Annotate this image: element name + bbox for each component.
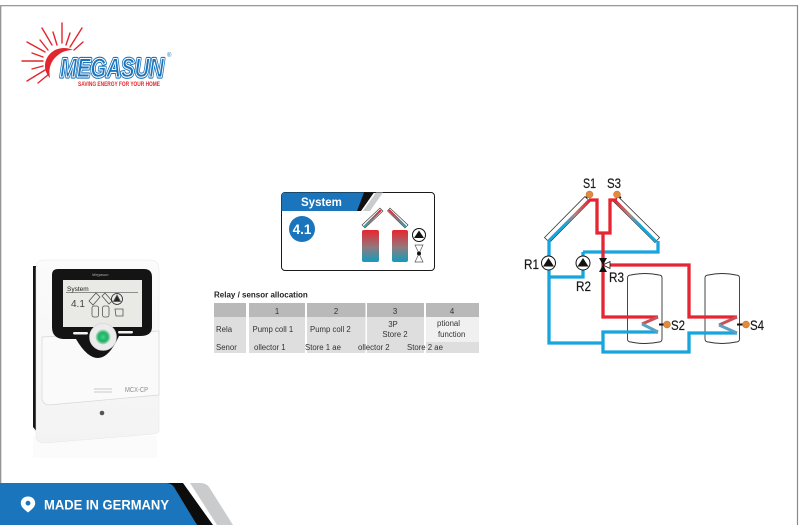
sensor cells: Store 1 ae: [305, 343, 341, 352]
sensor cells: ollector 2: [358, 343, 390, 352]
device LED: [96, 330, 110, 344]
mini collector right: [388, 208, 408, 228]
sensor cells: ollector 1: [254, 343, 286, 352]
header stripe black: [357, 192, 374, 211]
schematic labels: S3: [607, 175, 621, 191]
screen icons: [89, 293, 123, 317]
sensor S2: [659, 321, 670, 328]
device screen: [63, 280, 142, 327]
relay cells: Pump coll 2: [310, 325, 351, 334]
wordmark outline: MEGASUN: [60, 53, 164, 83]
icon: sun rays: [22, 23, 83, 83]
footer gray stripe: [190, 483, 233, 525]
tagline: SAVING ENERGY FOR YOUR HOME: [78, 82, 160, 88]
blue return pipes: [549, 241, 737, 352]
relay cells: Store 2: [382, 330, 408, 339]
header stripe gray: [363, 192, 383, 211]
heating coils: [642, 317, 737, 333]
sensor S4: [737, 321, 750, 328]
table: relay/sensor allocation: [214, 290, 479, 353]
panel header: [282, 192, 371, 211]
registered mark: ®: [167, 52, 172, 59]
device lower cover: [42, 331, 159, 405]
relay cells: [252, 319, 465, 339]
table column numbers: 1: [275, 307, 279, 316]
icon: location pin: [21, 496, 35, 512]
table highlighted cell: [426, 317, 479, 342]
schematic labels: R3: [609, 269, 624, 285]
relay cells: 3P: [388, 320, 398, 329]
row label relay: Rela: [216, 325, 233, 334]
footer black stripe: [166, 483, 213, 525]
table body rows: [214, 317, 479, 353]
pump R2: [576, 256, 590, 270]
device button right: [118, 331, 133, 334]
device body: [36, 260, 159, 443]
schematic labels: R1: [524, 256, 539, 272]
mini collector left: [362, 208, 383, 228]
relay cells: ptional: [437, 319, 460, 328]
number badge: 4.1: [293, 222, 312, 237]
sensor S3: [614, 191, 621, 198]
schematic labels: S2: [671, 317, 685, 333]
sensor cells: [254, 343, 443, 352]
collector 1: [544, 196, 590, 242]
schematic labels: S1: [583, 175, 596, 191]
device screw: [100, 411, 104, 415]
mini pump and valve: [412, 228, 426, 262]
sensor S1: [586, 191, 593, 198]
footer blue band: [0, 483, 197, 525]
logo: Megasun: [22, 23, 172, 88]
device grille: [94, 389, 112, 392]
schematic labels: [524, 175, 764, 333]
table heading: Relay / sensor allocation: [214, 290, 308, 300]
table column numbers: 4: [450, 307, 455, 316]
icon: sun arc: [45, 48, 73, 78]
pump R1: [542, 256, 556, 270]
schematic labels: R2: [576, 278, 591, 294]
device dial: [90, 324, 116, 350]
footer text: MADE IN GERMANY: [44, 496, 170, 512]
relay cells: function: [438, 330, 465, 339]
collector 2: [614, 196, 660, 242]
red flow pipes: [589, 200, 737, 317]
valve R3: [599, 258, 610, 272]
device brand mark: Megasun: [92, 272, 109, 277]
panel frame: [282, 192, 434, 270]
panel: system: [282, 192, 434, 270]
mini store 2: [392, 230, 408, 262]
row label sensor: Senor: [216, 343, 237, 352]
screen title: System: [67, 286, 89, 293]
device button left: [73, 332, 88, 334]
wordmark: MEGASUN: [60, 53, 164, 83]
device shadow: [33, 436, 157, 458]
panel title: System: [301, 197, 342, 209]
tank 1: [628, 274, 662, 344]
table header row: [214, 303, 479, 317]
table column numbers: 2: [334, 307, 338, 316]
relay cells: Pump coll 1: [252, 325, 293, 334]
screen rule: [66, 292, 138, 294]
screen system number: 4.1: [71, 299, 85, 310]
device back edge: [33, 266, 37, 432]
device bezel: [52, 269, 152, 358]
device model label: MCX-CP: [125, 387, 148, 394]
number badge: [289, 216, 315, 242]
sensor cells: Store 2 ae: [407, 343, 443, 352]
hydraulic schematic: [524, 175, 764, 352]
table column numbers: 3: [393, 307, 397, 316]
schematic labels: S4: [750, 317, 764, 333]
tank 2: [705, 274, 740, 344]
footer banner: [0, 483, 233, 525]
table column numbers: [275, 307, 455, 316]
device photo: controller: [33, 260, 159, 458]
mini store 1: [362, 230, 379, 262]
